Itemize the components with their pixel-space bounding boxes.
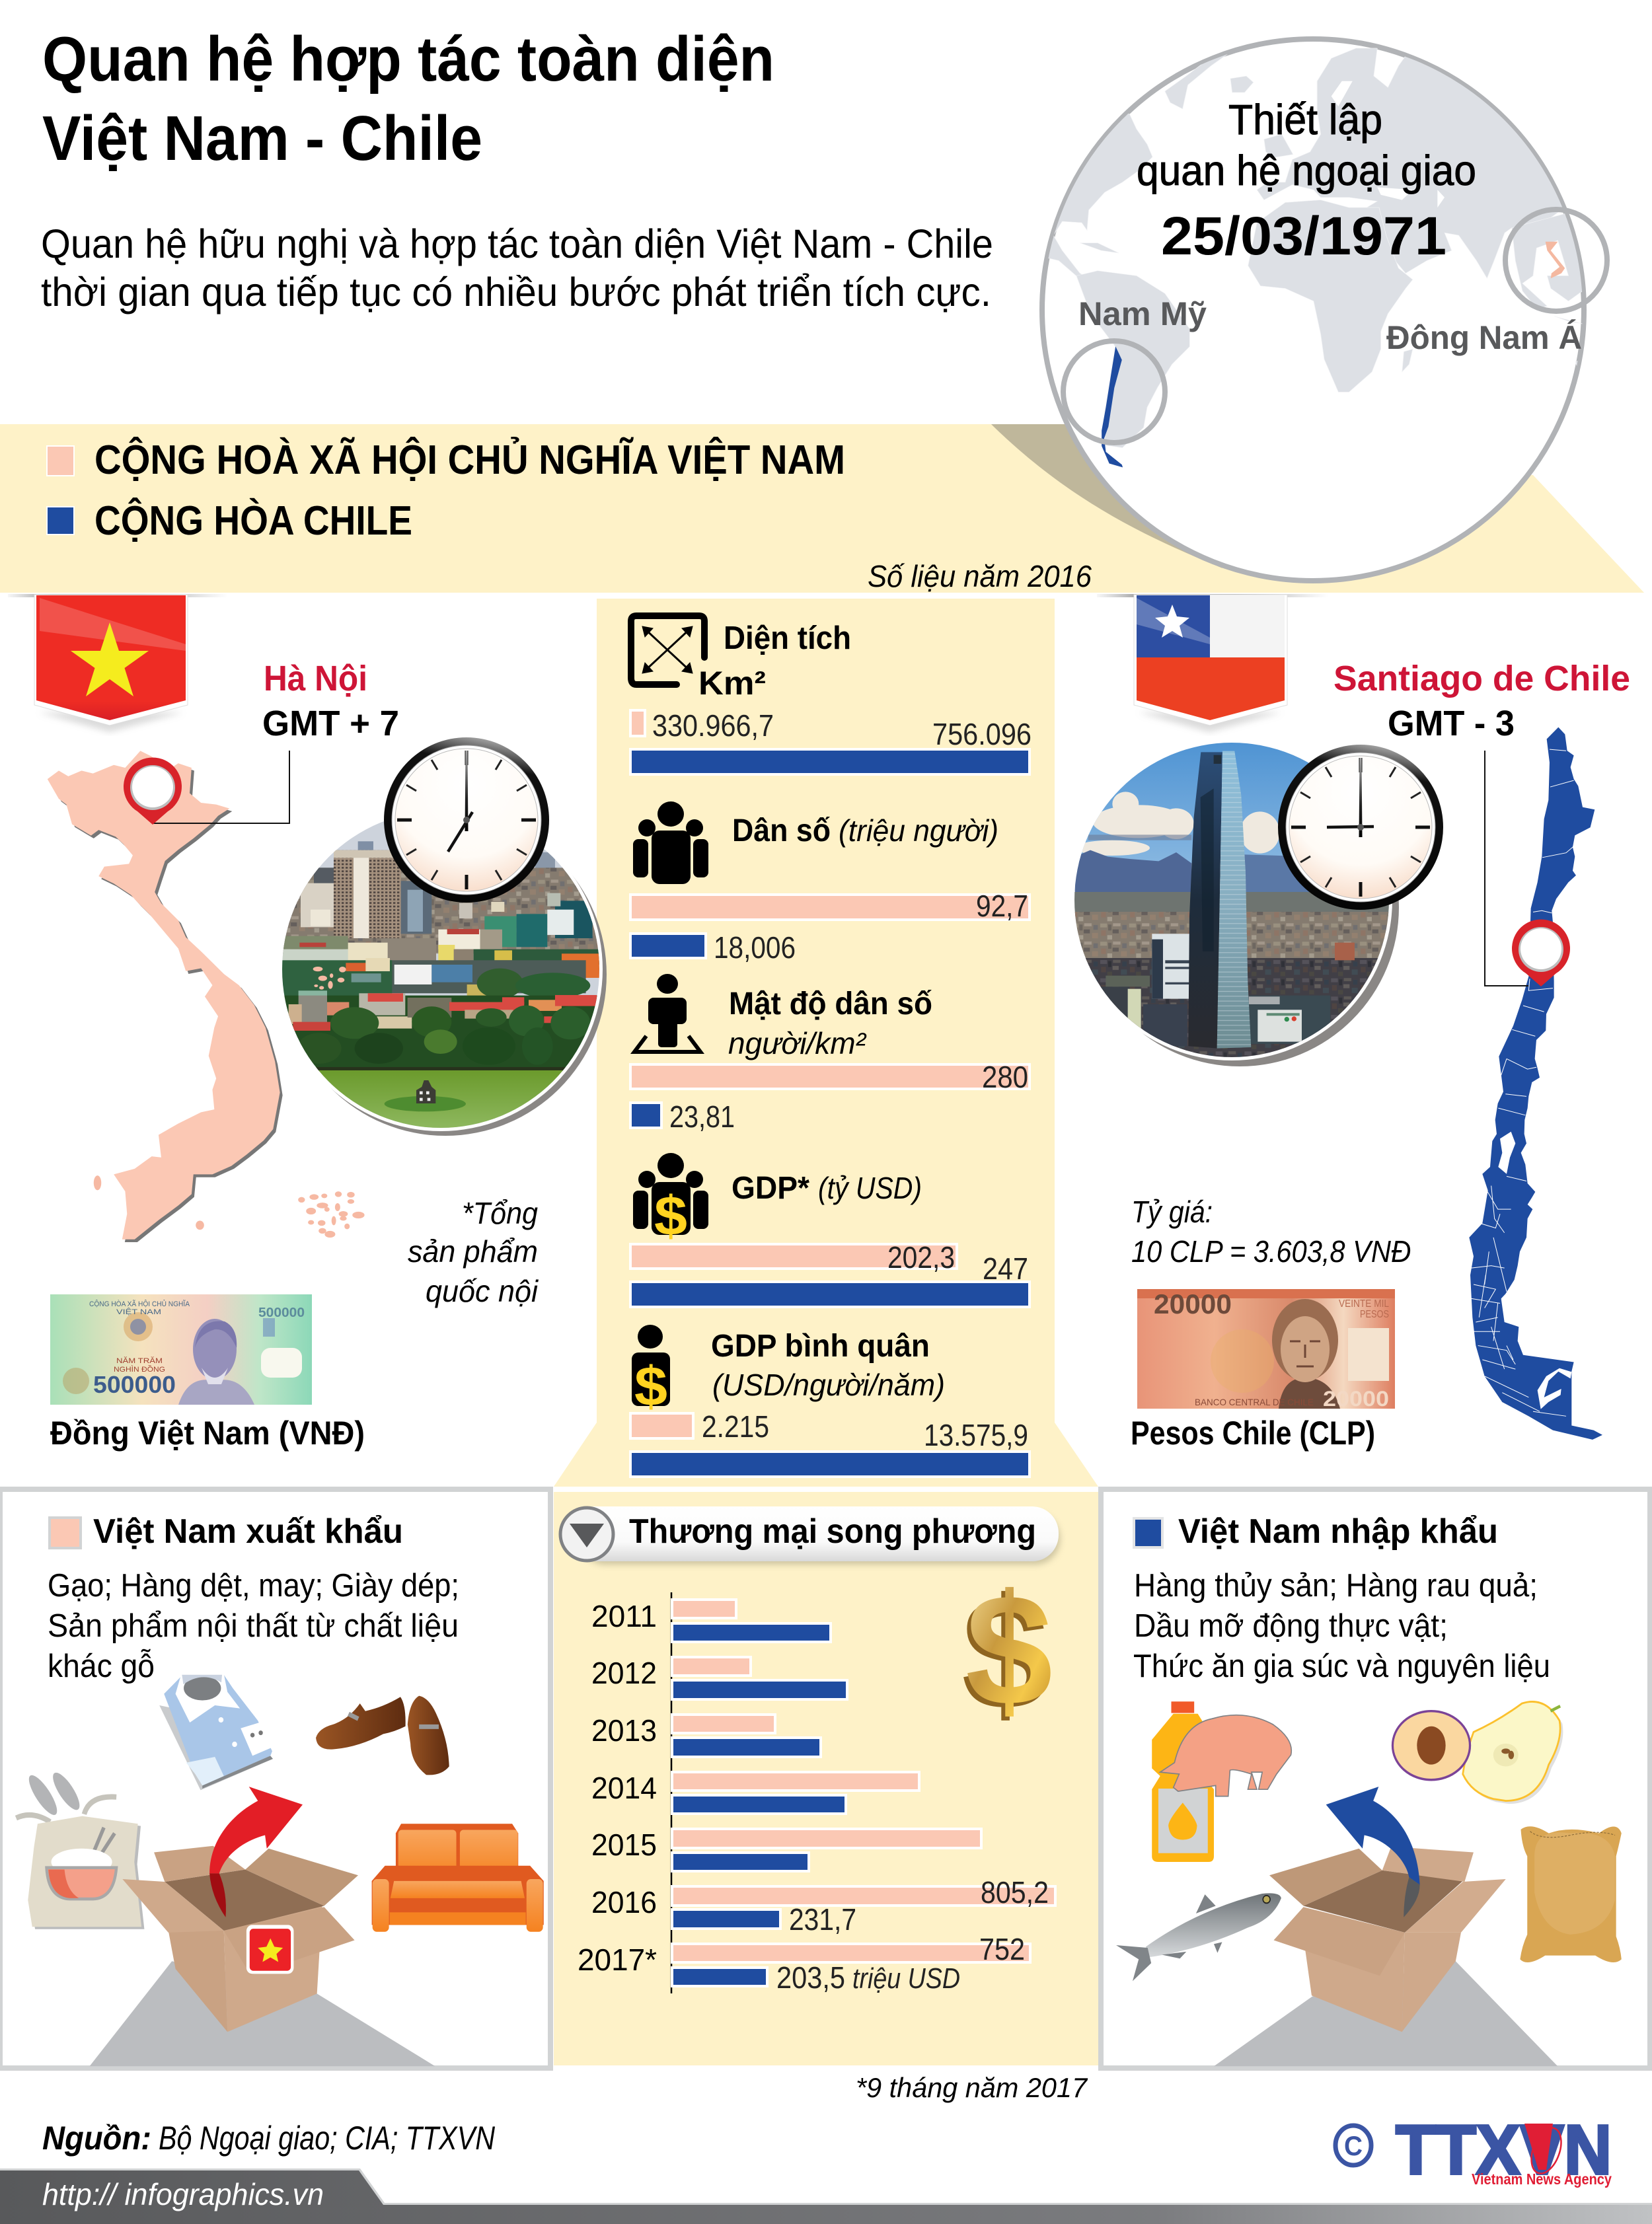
value: 2.215 <box>702 1409 769 1444</box>
note: exchange rate: Tỷ giá: <box>1131 1195 1213 1229</box>
footnote: 2017: *9 tháng năm 2017 <box>856 2072 1088 2103</box>
icon: rice bag <box>16 1769 144 1929</box>
leader line: Hà Nội <box>153 751 289 823</box>
photo: Hà Nội <box>282 821 599 1128</box>
label <box>711 1329 945 1402</box>
panel: Vietnam exports <box>0 1487 553 2071</box>
icon: sofa <box>372 1824 544 1932</box>
note: GDP definition: sản phẩm <box>408 1234 538 1269</box>
panel: bilateral trade <box>554 1492 1098 2065</box>
bar: Chile density <box>630 1103 661 1128</box>
legend swatch: Vietnam <box>47 446 74 476</box>
value: 92,7 <box>976 889 1028 923</box>
arrow: import <box>1326 1787 1420 1917</box>
banknote label: VND: Đồng Việt Nam (VNĐ) <box>50 1415 365 1452</box>
copyright mark: C <box>1344 2130 1363 2161</box>
clock: Hà Nội <box>384 737 549 903</box>
import list <box>1133 1568 1550 1684</box>
bar: Chile GDP <box>630 1282 1030 1307</box>
import list: Thức ăn gia súc và nguyên liệu <box>1133 1649 1550 1684</box>
label: Dân số <box>732 813 831 848</box>
bar chart: trade by year: 2015 <box>591 1828 657 1862</box>
map pin: Hà Nội <box>124 757 182 825</box>
import list: Hàng thủy sản; Hàng rau quả; <box>1134 1568 1538 1604</box>
banknote: CLP: 20000 <box>1323 1387 1389 1411</box>
islands over photo <box>313 967 346 990</box>
bar chart: trade by year: 2012 <box>591 1656 657 1690</box>
date: 25/03/1971 <box>1161 206 1446 266</box>
bar chart: trade by year: 2013 <box>591 1713 657 1748</box>
title <box>42 24 774 174</box>
website: http:// infographics.vn <box>42 2177 324 2211</box>
city label: Santiago de Chile: Santiago de Chile <box>1333 659 1630 698</box>
city label: Hà Nội: Hà Nội <box>264 659 367 698</box>
banknote: VND: NĂM TRĂM <box>116 1356 163 1365</box>
photo ring: Santiago <box>1071 739 1392 1060</box>
bar: Vietnam population <box>630 895 1030 920</box>
map: Vietnam <box>48 751 365 1242</box>
bar chart: trade by year: 805,2 <box>981 1875 1049 1909</box>
arrow: export <box>209 1787 303 1917</box>
label: GDP bình quân <box>711 1329 930 1364</box>
icon: gold dollar: $ <box>961 1565 1049 1742</box>
banknote: CLP <box>1137 1288 1395 1411</box>
unit: Km² <box>698 665 766 702</box>
banknote: VND: VIỆT NAM <box>116 1308 161 1316</box>
value: 202,3 <box>887 1240 955 1275</box>
city label: Santiago de Chile: GMT - 3 <box>1388 704 1515 743</box>
logo: TTXVN <box>1335 2111 1612 2189</box>
bar: Chile population <box>630 934 706 958</box>
icon: gold dollar: $ <box>965 1561 1053 1738</box>
stat: population <box>630 801 1030 965</box>
banknote: VND: 500000 <box>258 1306 305 1320</box>
tagline: Vietnam News Agency <box>1472 2170 1612 2188</box>
wordmark: TTXVN <box>1396 2111 1612 2189</box>
icon: shoes <box>316 1696 449 1775</box>
stat: GDP <box>630 1153 1030 1307</box>
legend swatch: Chile <box>47 507 74 535</box>
banknote: VND <box>50 1294 312 1405</box>
Chile on globe <box>1102 346 1123 467</box>
photo shadow: Santiago <box>1080 748 1399 1066</box>
banknote: VND: 500000 <box>93 1371 176 1398</box>
clock: Santiago <box>1278 745 1443 910</box>
value: 13.575,9 <box>924 1418 1028 1452</box>
label: (USD/người/năm) <box>712 1368 945 1402</box>
icon: fish <box>1116 1893 1281 1981</box>
circle: Southeast Asia <box>1505 209 1607 311</box>
flag: Chile <box>1097 594 1328 732</box>
bar: Vietnam GDP <box>630 1244 957 1269</box>
icon: cardboard box <box>1214 1847 1558 2066</box>
photo: Santiago <box>1070 740 1401 1068</box>
label: Nam Mỹ: Nam Mỹ <box>1078 295 1207 332</box>
heading: Việt Nam nhập khẩu <box>1178 1512 1498 1551</box>
icon: pig <box>1160 1715 1291 1797</box>
icon: plum and pear <box>1392 1701 1563 1804</box>
banknote: CLP: BANCO CENTRAL DE CHILE <box>1195 1397 1314 1407</box>
photo shadow: Hà Nội <box>284 813 607 1136</box>
swatch <box>1134 1518 1162 1547</box>
value: 280 <box>982 1060 1028 1094</box>
label: Thiết lập quan hệ ngoại giao: quan hệ ngoại giao <box>1137 147 1476 194</box>
photo ring: Hà Nội <box>279 807 603 1131</box>
label: Đông Nam Á: Đông Nam Á <box>1386 319 1582 356</box>
banner shadow <box>991 424 1222 568</box>
map pin: Santiago <box>1512 919 1570 986</box>
banknote: VND: CỘNG HÒA XÃ HỘI CHỦ NGHĨA <box>89 1300 190 1308</box>
icon: oil bottle <box>1152 1701 1214 1862</box>
icon: area <box>631 616 704 685</box>
flag: Vietnam <box>8 594 228 732</box>
illustration group: exports <box>16 1674 544 2066</box>
bar: Vietnam GDP per capita <box>630 1413 693 1438</box>
bar: Vietnam area <box>630 710 645 736</box>
icon: person with dollar <box>632 1325 670 1417</box>
banknote: VND: NGHÌN ĐỒNG <box>114 1365 165 1374</box>
city label: Hà Nội: GMT + 7 <box>262 704 399 743</box>
bar: Vietnam density <box>630 1064 1030 1089</box>
export list: Gạo; Hàng dệt, may; Giày dép; <box>48 1568 459 1604</box>
label: Diện tích <box>724 620 851 656</box>
swatch <box>50 1518 81 1548</box>
copyright mark <box>1335 2126 1371 2165</box>
legend label: Vietnam: CỘNG HOÀ XÃ HỘI CHỦ NGHĨA VIỆT NAM <box>94 437 845 483</box>
label: Thiết lập quan hệ ngoại giao: Thiết lập <box>1228 96 1382 143</box>
Vietnam on globe <box>1546 242 1565 278</box>
central stats panel <box>554 599 1098 1487</box>
bar chart: trade by year: 2016 <box>591 1885 657 1919</box>
icon: feed sack <box>1520 1826 1622 1962</box>
value: 18,006 <box>714 930 796 965</box>
illustration group: imports <box>1116 1701 1622 2066</box>
stat: land area <box>630 616 1032 774</box>
bar chart: trade by year: 2017* <box>578 1943 657 1977</box>
source: Bộ Ngoại giao; CIA; TTXVN <box>159 2120 496 2157</box>
intro text: Quan hệ hữu nghị và hợp tác toàn diện Việt Nam - Chile <box>41 221 993 266</box>
legend: countries <box>47 437 845 544</box>
icon: shirt <box>159 1674 273 1790</box>
footer bar <box>0 2168 1652 2224</box>
label: GDP* <box>732 1171 809 1206</box>
icon: person with dollar: $ <box>634 1355 667 1417</box>
source <box>42 2120 496 2157</box>
export list <box>48 1568 459 1684</box>
globe circle <box>1037 39 1607 581</box>
leader line: Santiago <box>1485 751 1528 986</box>
note: exchange rate: 10 CLP = 3.603,8 VNĐ <box>1131 1234 1411 1269</box>
city label: Santiago de Chile <box>1333 659 1630 743</box>
icon: people <box>633 801 708 884</box>
city label: Hà Nội <box>262 659 399 743</box>
icon: person on area <box>634 974 700 1052</box>
banknote: CLP: 20000 <box>1154 1288 1232 1319</box>
legend label: Chile: CỘNG HÒA CHILE <box>94 498 412 544</box>
bar chart: trade by year: 231,7 <box>789 1902 856 1937</box>
label: Thiết lập quan hệ ngoại giao <box>1137 96 1476 194</box>
title: Việt Nam - Chile <box>42 103 482 174</box>
world map <box>1037 48 1604 448</box>
bar chart: trade by year: triệu USD <box>852 1962 960 1995</box>
year note: Số liệu năm 2016 <box>868 559 1092 593</box>
note: GDP definition: *Tổng <box>462 1196 538 1230</box>
unit: (tỷ USD) <box>818 1171 922 1205</box>
value: 330.966,7 <box>652 708 774 743</box>
bar chart: trade by year <box>578 1592 1055 1995</box>
heading pill <box>560 1506 1060 1565</box>
intro text: thời gian qua tiếp tục có nhiều bước phát triển tích cực. <box>41 270 991 315</box>
intro text <box>41 221 993 315</box>
icon: people with dollar: $ <box>654 1185 687 1247</box>
label: Mật độ dân số <box>729 986 932 1021</box>
panel: Vietnam imports <box>1098 1487 1652 2071</box>
value: 23,81 <box>669 1099 735 1134</box>
circle: South America <box>1063 341 1165 443</box>
title: Quan hệ hợp tác toàn diện <box>42 24 774 94</box>
import list: Dầu mỡ động thực vật; <box>1134 1608 1448 1644</box>
note: exchange rate <box>1131 1195 1411 1269</box>
note: GDP definition <box>408 1196 539 1308</box>
bar chart: trade by year: 2014 <box>591 1771 657 1805</box>
stat: population density <box>630 974 1030 1134</box>
banknote: CLP: VEINTE MIL <box>1339 1298 1389 1310</box>
stat: GDP per capita <box>630 1325 1030 1477</box>
map: Chile <box>1469 727 1602 1440</box>
icon: people with dollar <box>633 1153 708 1247</box>
source: Nguồn: <box>42 2120 151 2157</box>
value: 247 <box>983 1251 1028 1286</box>
icon: cardboard box <box>90 1846 435 2066</box>
heading: Việt Nam xuất khẩu <box>93 1512 403 1551</box>
export list: khác gỗ <box>48 1649 155 1684</box>
heading: Thương mại song phương <box>629 1512 1036 1551</box>
banner band <box>0 424 1644 593</box>
unit: (triệu người) <box>839 813 998 848</box>
bar: Chile GDP per capita <box>630 1452 1030 1477</box>
note: GDP definition: quốc nội <box>426 1274 539 1308</box>
banknote: CLP: PESOS <box>1360 1309 1389 1320</box>
value: 756.096 <box>932 717 1032 751</box>
banknote label: CLP: Pesos Chile (CLP) <box>1131 1415 1375 1452</box>
unit: người/km² <box>728 1026 867 1060</box>
bar: Chile area <box>630 749 1030 774</box>
bar chart: trade by year: 2011 <box>591 1599 657 1633</box>
bar chart: trade by year: 752 <box>979 1932 1025 1966</box>
icon: down arrow button <box>560 1508 613 1561</box>
bar chart: trade by year: 203,5 <box>776 1960 845 1995</box>
export list: Sản phẩm nội thất từ chất liệu <box>48 1608 459 1644</box>
